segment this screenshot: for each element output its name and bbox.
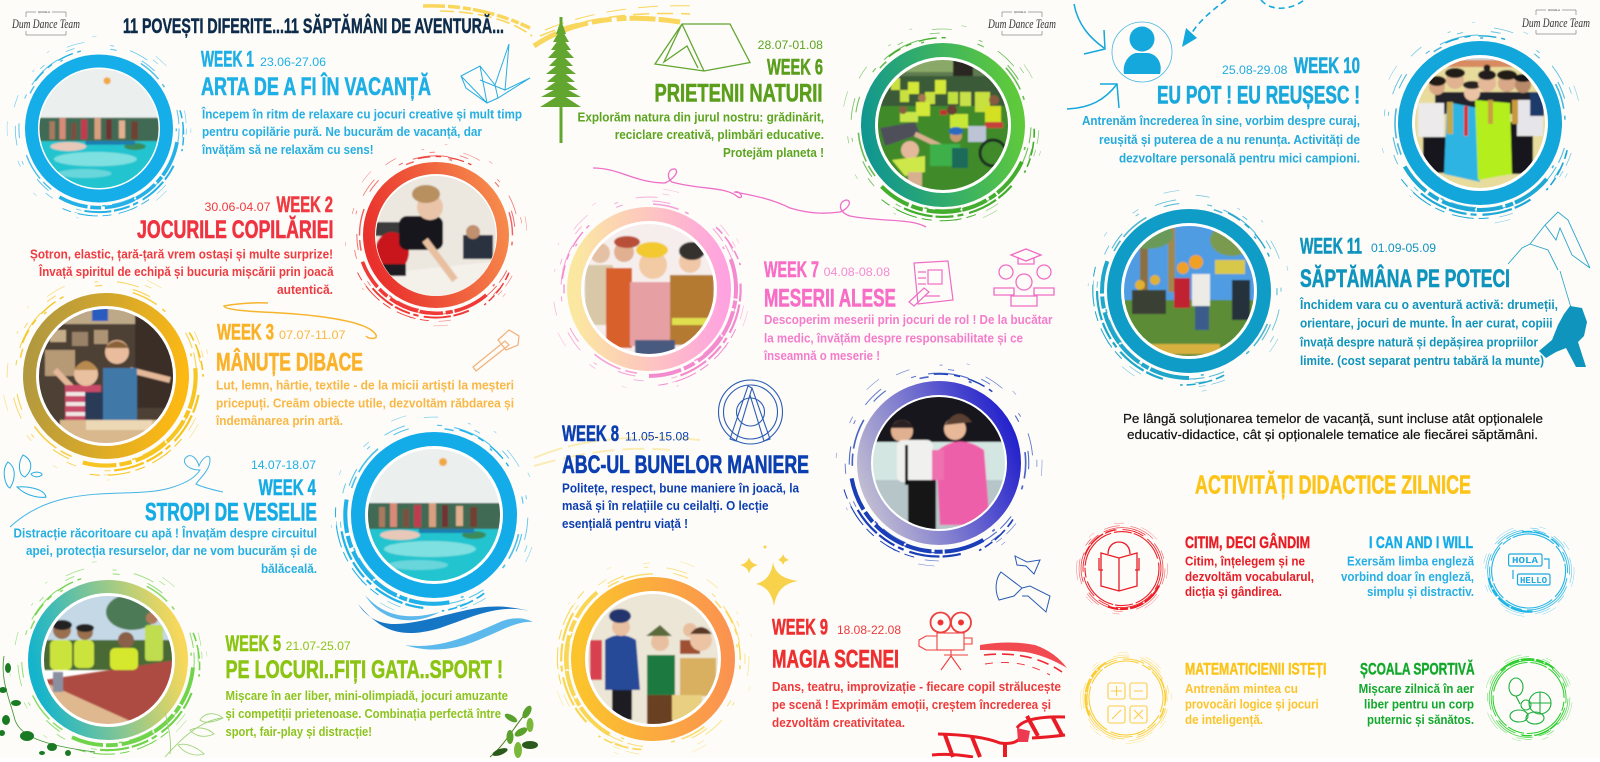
description bbox=[14, 525, 317, 576]
description: autentică. bbox=[277, 282, 333, 297]
description: limite. (cost separat pentru tabără la munte) bbox=[1300, 353, 1544, 368]
logo: top right bbox=[1521, 8, 1590, 34]
note text: educativ-didactice, cât și opționalele tematice ale fiecărei săptămâni. bbox=[1127, 427, 1538, 442]
heading: I CAN AND I WILL bbox=[1369, 533, 1473, 552]
icon: sports balls in green ring bbox=[1473, 642, 1585, 754]
description bbox=[1185, 681, 1319, 727]
icon: hammer bbox=[473, 330, 519, 371]
description: Antrenăm mintea cu bbox=[1185, 681, 1298, 696]
heading: MATEMATICIENII ISTEȚI bbox=[1185, 660, 1326, 679]
panel: week 9 bbox=[556, 546, 1067, 758]
description bbox=[1359, 681, 1474, 727]
week label: WEEK 8 bbox=[562, 421, 619, 446]
heading: JOCURILE COPILĂRIEI bbox=[137, 215, 334, 244]
icon: book in red ring bbox=[1076, 523, 1168, 614]
decoration: leaf sprig outline bbox=[165, 712, 223, 757]
dates: 01.09-05.09 bbox=[1371, 241, 1436, 255]
description bbox=[201, 106, 522, 157]
heading: MESERII ALESE bbox=[764, 285, 896, 313]
heading: PE LOCURI..FIȚI GATA..SPORT ! bbox=[226, 656, 503, 684]
description bbox=[30, 247, 334, 297]
ring: week 4 bbox=[302, 383, 566, 647]
week label: WEEK 5 bbox=[226, 631, 281, 656]
description: sport, fair-play și distracție! bbox=[226, 724, 372, 739]
photo: girl drawing bbox=[376, 176, 496, 296]
panel: week 6 bbox=[540, 17, 1041, 222]
description: pricepuți. Creăm obiecte utile, dezvoltăm răbdarea și bbox=[216, 396, 514, 411]
photo: kids in workshop bbox=[39, 309, 173, 443]
activity: math bbox=[1062, 634, 1326, 762]
description: Exersăm limba engleză bbox=[1347, 554, 1475, 569]
description: învățăm să ne relaxăm cu sens! bbox=[201, 142, 374, 157]
description: Citim, înțelegem și ne bbox=[1185, 554, 1305, 569]
description: puternic și sănătos. bbox=[1367, 712, 1474, 727]
photo: pool party bbox=[368, 449, 500, 581]
icon: film camera bbox=[919, 612, 972, 670]
description: Lut, lemn, hârtie, textile - de la micii artiști la meșteri bbox=[216, 378, 514, 393]
description bbox=[1341, 554, 1475, 599]
ring: week 9 bbox=[524, 530, 782, 762]
description bbox=[1299, 297, 1558, 368]
description: învață despre natură și depășirea propriilor bbox=[1299, 334, 1538, 349]
description: Politețe, respect, bune maniere în joacă, la bbox=[562, 480, 800, 496]
heading: MÂNUȚE DIBACE bbox=[216, 346, 363, 376]
photo: kids in costumes bbox=[588, 594, 718, 724]
icon: graduates bbox=[994, 249, 1054, 306]
logo: top middle: Dum Dance Team bbox=[987, 16, 1056, 31]
logo: top left: Dum Dance Team bbox=[11, 16, 80, 31]
ring: week 3 bbox=[0, 249, 233, 503]
arrow: dashed bbox=[1182, 0, 1304, 47]
ring: week 2 bbox=[308, 107, 564, 363]
icon: fir tree bbox=[540, 17, 581, 143]
ring: week 5 bbox=[1, 553, 215, 762]
description: de inteligență. bbox=[1185, 712, 1263, 727]
week label: WEEK 7 bbox=[764, 257, 819, 282]
dates: 18.08-22.08 bbox=[837, 623, 901, 637]
description: Șotron, elastic, țară-țară vrem ostași și multe surprize! bbox=[30, 247, 333, 262]
description: Protejăm planeta ! bbox=[723, 145, 824, 160]
photo: pool party bbox=[40, 69, 158, 188]
panel: week 1 bbox=[7, 37, 530, 220]
icon: calculator in yellow ring bbox=[1062, 634, 1190, 762]
icon: person in circle bbox=[1112, 22, 1172, 82]
description: și competiții prietenoase. Combinația perfectă între bbox=[226, 706, 501, 721]
description: reușită și puterea de a nu renunța. Activități de bbox=[1099, 132, 1360, 147]
decoration: gold swirl bbox=[224, 303, 376, 338]
decoration: pale yellow streak behind week 8 bbox=[534, 437, 700, 466]
ring: week 11 bbox=[1072, 174, 1306, 408]
panel: week 5 bbox=[0, 553, 538, 762]
description: dezvoltăm vocabularul, bbox=[1185, 569, 1314, 584]
brush: yellow streak top bbox=[423, 6, 700, 46]
activity: reading bbox=[1076, 523, 1314, 614]
dates: 23.06-27.06 bbox=[260, 55, 326, 69]
panel: week 7 bbox=[511, 151, 1054, 427]
description bbox=[772, 679, 1061, 730]
description: înseamnă o meserie ! bbox=[763, 348, 880, 363]
photo: adventure park bbox=[1124, 226, 1254, 356]
dates: 25.08-29.08 bbox=[1222, 63, 1288, 77]
heading: STROPI DE VESELIE bbox=[145, 498, 317, 526]
decoration: left vine bbox=[0, 656, 95, 756]
arrow: upper left bbox=[1074, 4, 1105, 54]
description bbox=[562, 480, 800, 531]
dates: 07.07-11.07 bbox=[279, 328, 346, 342]
panel: week 4 bbox=[4, 416, 533, 650]
description: esențială pentru viață ! bbox=[562, 516, 688, 531]
icon: hola hello in blue ring: HOLA bbox=[1512, 556, 1539, 566]
description: masă și în relațiile cu ceilalți. O lecție bbox=[562, 498, 768, 513]
description: Descoperim meserii prin jocuri de rol ! De la bucătar bbox=[764, 312, 1052, 327]
icon: hola hello in blue ring bbox=[1466, 509, 1591, 633]
week label: WEEK 9 bbox=[772, 614, 828, 640]
description bbox=[226, 688, 508, 739]
heading: daily activities: ACTIVITĂȚI DIDACTICE ZILNICE bbox=[1195, 470, 1471, 500]
note text: Pe lângă soluționarea temelor de vacanță, sunt incluse atât opționalele bbox=[1123, 411, 1543, 426]
heading: CITIM, DECI GÂNDIM bbox=[1185, 533, 1310, 552]
heading: EU POT ! EU REUȘESC ! bbox=[1157, 82, 1360, 110]
photo: kids on track bbox=[44, 596, 172, 724]
description bbox=[763, 312, 1052, 363]
photo: dance champions bbox=[1415, 58, 1545, 188]
description: Explorăm natura din jurul nostru: grădinărit, bbox=[578, 110, 824, 125]
title: 11 POVEȘTI DIFERITE...11 SĂPTĂMÂNI DE AVENTURĂ... bbox=[123, 14, 504, 38]
week label: WEEK 4 bbox=[259, 475, 317, 500]
description bbox=[1185, 554, 1314, 599]
logo: top middle: ȘCOALA bbox=[1014, 10, 1026, 14]
dates: 28.07-01.08 bbox=[758, 38, 823, 52]
description bbox=[578, 110, 824, 160]
description: vorbind doar în engleză, bbox=[1341, 569, 1474, 584]
dates: 21.07-25.07 bbox=[286, 639, 351, 653]
panel: week 10 bbox=[1067, 0, 1579, 224]
description: reciclare creativă, plimbări educative. bbox=[615, 127, 824, 142]
description: Dans, teatru, improvizație - fiecare copil strălucește bbox=[772, 679, 1061, 694]
week label: WEEK 6 bbox=[767, 54, 823, 79]
week label: WEEK 10 bbox=[1294, 53, 1360, 78]
description: provocări logice și jocuri bbox=[1185, 697, 1319, 712]
activity: sport bbox=[1359, 642, 1585, 754]
description: dezvoltare personală pentru mici campioni. bbox=[1119, 150, 1360, 166]
heading: ȘCOALA SPORTIVĂ bbox=[1360, 660, 1475, 679]
description: simplu și distractiv. bbox=[1367, 584, 1474, 599]
dates: 11.05-15.08 bbox=[625, 430, 689, 444]
description: bălăceală. bbox=[261, 561, 317, 576]
icon: compass bbox=[718, 380, 782, 444]
panel: week 2 bbox=[30, 144, 527, 326]
icon: climber with rope bbox=[1539, 271, 1587, 367]
logo: top left bbox=[11, 10, 80, 35]
ring: week 7 bbox=[511, 151, 787, 427]
heading: MAGIA SCENEI bbox=[772, 646, 899, 674]
description: pentru copilărie pură. Ne bucurăm de vacanță, dar bbox=[202, 124, 482, 139]
panel: week 3 bbox=[4, 276, 520, 480]
description: Mișcare în aer liber, mini-olimpiadă, jocuri amuzante bbox=[226, 688, 508, 703]
panel: week 11 bbox=[1088, 190, 1590, 392]
ring: week 8 bbox=[794, 318, 1084, 608]
description: apei, protecția resurselor, dar ne vom bucurăm și de bbox=[26, 543, 317, 558]
logo: top left: ȘCOALA bbox=[38, 10, 50, 14]
brush: red streak bbox=[980, 642, 1067, 675]
icon: tent bbox=[655, 24, 750, 71]
icon: origami crane bbox=[461, 44, 530, 103]
icon: document and pencil bbox=[909, 261, 953, 306]
description: liber pentru un corp bbox=[1364, 697, 1474, 712]
heading: SĂPTĂMÂNA PE POTECI bbox=[1300, 263, 1510, 293]
dates: 30.06-04.07 bbox=[204, 200, 271, 214]
description bbox=[215, 378, 514, 428]
week label: WEEK 2 bbox=[276, 192, 333, 217]
photo: dance couple bbox=[873, 397, 1005, 529]
decoration: green leaf branch bbox=[490, 704, 538, 758]
icon: water drops bbox=[4, 455, 46, 497]
description: îndemânarea prin artă. bbox=[215, 413, 343, 428]
bottom white strip bbox=[0, 758, 1600, 762]
photo: kids in work costumes bbox=[584, 224, 714, 354]
description: Distracție răcoritoare cu apă ! Învațăm despre circuitul bbox=[14, 525, 317, 540]
dates: 14.07-18.07 bbox=[251, 458, 316, 472]
description: Închidem vara cu o aventură activă: drumeții, bbox=[1299, 297, 1558, 312]
photo: kids on grass bbox=[878, 60, 1008, 190]
icon: film strip bbox=[932, 716, 1065, 757]
icon: bow ties bbox=[996, 556, 1050, 612]
description: Antrenăm încrederea în sine, vorbim despre curaj, bbox=[1082, 113, 1360, 128]
ring: week 1 bbox=[7, 37, 191, 220]
week label: WEEK 3 bbox=[217, 320, 274, 345]
note text bbox=[1123, 411, 1543, 442]
heading: ABC-UL BUNELOR MANIERE bbox=[562, 451, 809, 479]
activity: english bbox=[1341, 509, 1591, 633]
arrow: lower left bbox=[1067, 84, 1119, 109]
decoration: blue waves bbox=[358, 595, 533, 650]
week label: WEEK 11 bbox=[1300, 234, 1362, 259]
description: pe scenă ! Exprimăm emoții, creștem încrederea și bbox=[772, 697, 1051, 712]
logo: top right: ȘCOALA bbox=[1548, 8, 1560, 12]
icon: mountain bbox=[1508, 212, 1590, 270]
description: dicția și gândirea. bbox=[1185, 584, 1282, 599]
decoration: pink squiggle bbox=[593, 168, 926, 227]
description: Începem în ritm de relaxare cu jocuri creative și mult timp bbox=[201, 106, 522, 121]
heading: PRIETENII NATURII bbox=[654, 79, 822, 107]
description bbox=[1082, 113, 1360, 166]
icon: sparkles bbox=[740, 546, 798, 606]
description: Mișcare zilnică în aer bbox=[1359, 681, 1474, 696]
description: orientare, jocuri de munte. În aer curat, copiii bbox=[1300, 316, 1552, 330]
icon: hola hello in blue ring: HELLO bbox=[1520, 576, 1548, 586]
description: Învață spiritul de echipă și bucuria mișcării prin joacă bbox=[38, 264, 334, 279]
ring: week 6 bbox=[819, 1, 1067, 249]
dates: 04.08-08.08 bbox=[824, 265, 890, 279]
description: dezvoltăm creativitatea. bbox=[772, 715, 905, 730]
week label: WEEK 1 bbox=[201, 46, 254, 72]
logo: top middle bbox=[987, 10, 1056, 35]
decoration: heart line bbox=[10, 456, 223, 527]
panel: week 8 bbox=[562, 364, 1051, 613]
heading: ARTA DE A FI ÎN VACANȚĂ bbox=[201, 71, 431, 101]
description: la medic, învățăm despre responsabilitate și ce bbox=[764, 330, 1023, 346]
ring: week 10 bbox=[1342, 0, 1600, 261]
